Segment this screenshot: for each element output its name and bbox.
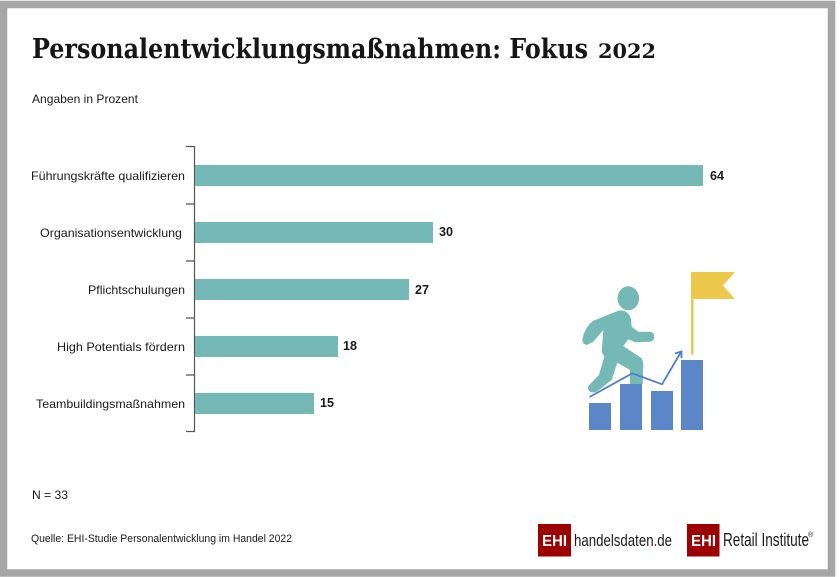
row: Teambuildingsmaßnahmen: Teambuildingsmaßnahmen — [36, 397, 185, 411]
row: Pflichtschulungen — [88, 279, 429, 300]
row: Pflichtschulungen: Pflichtschulungen — [88, 283, 185, 297]
row: Führungskräfte qualifizieren: 64 — [710, 169, 724, 183]
icon: flag — [691, 272, 735, 355]
title: Personalentwicklungsmaßnahmen: Fokus — [32, 33, 588, 65]
row: Pflichtschulungen: 27 — [415, 283, 429, 297]
logo: EHI handelsdaten.de: EHI — [542, 533, 567, 550]
row: Organisationsentwicklung: Organisationsentwicklung — [40, 226, 182, 240]
subtitle: Angaben in Prozent — [32, 92, 139, 106]
icon: bars — [589, 360, 703, 430]
row: Organisationsentwicklung: 30 — [439, 225, 453, 239]
row: High Potentials fördern — [57, 336, 357, 357]
row: Organisationsentwicklung — [40, 222, 453, 243]
logo: EHI Retail Institute: ® — [808, 531, 814, 539]
logo: EHI Retail Institute: EHI — [691, 533, 716, 550]
row: High Potentials fördern: High Potentials fördern — [57, 340, 185, 354]
source: Quelle: EHI-Studie Personalentwicklung im Handel 2022 — [31, 533, 292, 545]
row: Führungskräfte qualifizieren: Führungskräfte qualifizieren — [31, 169, 185, 183]
icon: trend arrow — [590, 352, 682, 397]
row: Teambuildingsmaßnahmen: 15 — [320, 396, 334, 410]
row: Teambuildingsmaßnahmen — [36, 393, 334, 414]
bar chart — [31, 146, 724, 432]
logo: EHI handelsdaten.de — [538, 524, 672, 556]
logo: EHI Retail Institute: Retail Institute — [723, 530, 809, 550]
logo: EHI handelsdaten.de: handelsdaten.de — [574, 531, 672, 550]
icon: person — [582, 286, 654, 392]
sample size note: N = 33 — [32, 488, 68, 502]
logo: EHI Retail Institute — [687, 524, 814, 556]
axis — [186, 146, 194, 432]
row: Führungskräfte qualifizieren — [31, 165, 724, 186]
row: High Potentials fördern: 18 — [343, 339, 357, 353]
title: 2022 — [598, 39, 656, 63]
icon: person climbing bars to flag — [582, 272, 735, 430]
